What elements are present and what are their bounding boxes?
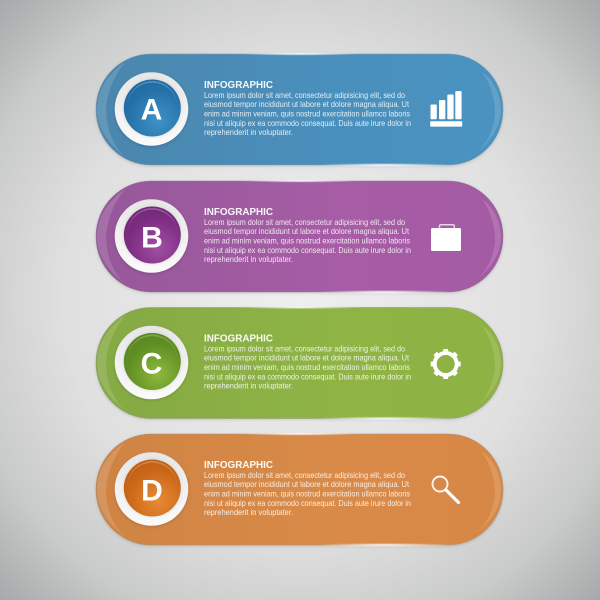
body text B: nisi ut aliquip ex ea commodo consequat. Duis aute irure dolor in (204, 245, 411, 255)
badge B: B (141, 222, 163, 254)
body text D: reprehenderit in voluptater. (204, 507, 293, 517)
body text D: nisi ut aliquip ex ea commodo consequat. Duis aute irure dolor in (204, 498, 411, 508)
badge D (115, 452, 188, 527)
body text A: Lorem ipsum dolor sit amet, consectetur adipisicing elit, sed do (204, 90, 405, 100)
body text B: enim ad minim veniam, quis nostrud exercitation ullamco laboris (204, 236, 410, 246)
body text C: reprehenderit in voluptater. (204, 380, 293, 390)
body text D (204, 470, 411, 517)
body text C (204, 344, 411, 390)
body text A (204, 90, 411, 137)
badge D: D (141, 474, 163, 508)
body text B: Lorem ipsum dolor sit amet, consectetur adipisicing elit, sed do (204, 217, 405, 227)
body text A: eiusmod tempor incididunt ut labore et dolore magna aliqua. Ut (204, 99, 410, 109)
panel C pill (96, 306, 503, 420)
body text B: reprehenderit in voluptater. (204, 254, 293, 264)
body text D: enim ad minim veniam, quis nostrud exercitation ullamco laboris (204, 488, 410, 498)
badge B (115, 199, 188, 274)
heading D: INFOGRAPHIC (204, 460, 274, 471)
panel A pill (96, 52, 503, 167)
badge A: A (141, 94, 162, 126)
icon: bar chart (430, 91, 462, 127)
body text A: reprehenderit in voluptater. (204, 127, 293, 137)
panel D pill (96, 432, 503, 547)
body text C: enim ad minim veniam, quis nostrud exercitation ullamco laboris (204, 362, 410, 372)
icon: briefcase (431, 225, 461, 251)
body text D: Lorem ipsum dolor sit amet, consectetur adipisicing elit, sed do (204, 470, 405, 480)
body text B (204, 217, 411, 264)
panel: B (96, 179, 503, 294)
body text C: Lorem ipsum dolor sit amet, consectetur adipisicing elit, sed do (204, 344, 405, 354)
badge A (115, 72, 188, 147)
icon: magnifier (432, 476, 458, 502)
body text A: nisi ut aliquip ex ea commodo consequat. Duis aute irure dolor in (204, 118, 411, 128)
panel B pill (96, 179, 503, 294)
panel: C (96, 306, 503, 420)
heading A: INFOGRAPHIC (204, 80, 274, 91)
badge C: C (141, 348, 162, 380)
body text C: eiusmod tempor incididunt ut labore et dolore magna aliqua. Ut (204, 353, 410, 363)
body text D: eiusmod tempor incididunt ut labore et dolore magna aliqua. Ut (204, 479, 410, 489)
body text A: enim ad minim veniam, quis nostrud exercitation ullamco laboris (204, 108, 410, 118)
heading B: INFOGRAPHIC (204, 207, 274, 218)
panel: A (96, 52, 503, 167)
badge C (115, 326, 188, 400)
panel: D (96, 432, 503, 547)
icon: gear (431, 349, 461, 379)
heading C: INFOGRAPHIC (204, 334, 274, 344)
body text C: nisi ut aliquip ex ea commodo consequat. Duis aute irure dolor in (204, 371, 411, 381)
body text B: eiusmod tempor incididunt ut labore et dolore magna aliqua. Ut (204, 226, 410, 236)
